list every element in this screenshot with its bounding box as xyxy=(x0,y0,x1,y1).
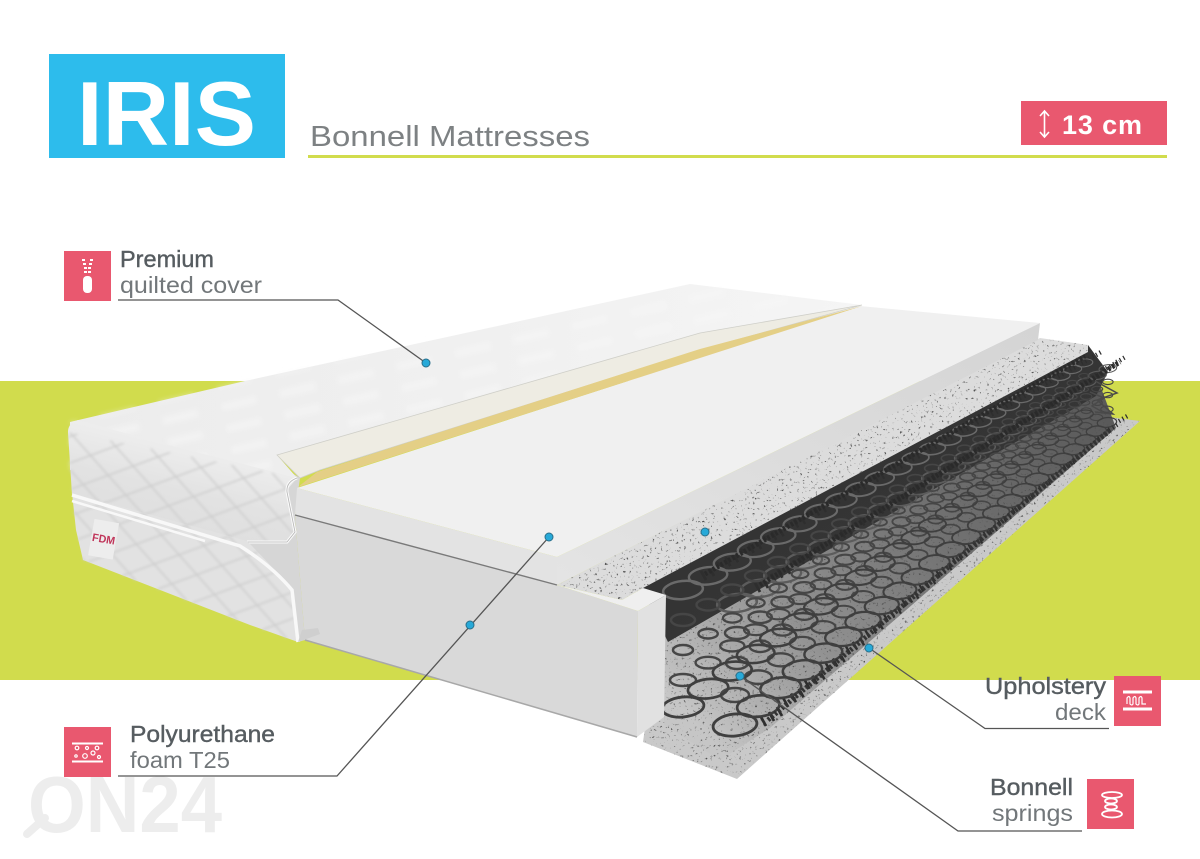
leader line xyxy=(118,537,549,776)
leader line xyxy=(118,300,426,363)
spring bed shading xyxy=(664,385,1116,760)
label text: deck xyxy=(1055,699,1107,725)
Bonnell spring rows xyxy=(661,351,1128,738)
callout: Bonnell springs xyxy=(736,672,1134,831)
label text: Upholstery xyxy=(985,673,1107,699)
marker dots xyxy=(701,528,873,652)
marker dots xyxy=(466,533,553,629)
label text: springs xyxy=(992,800,1073,826)
label text: quilted cover xyxy=(120,272,262,298)
cover lower flap with label xyxy=(72,493,320,642)
leader line xyxy=(869,648,1109,728)
height badge: 13 cm xyxy=(1021,101,1167,145)
title block: IRIS: IRIS xyxy=(77,64,256,165)
green background band xyxy=(0,381,1200,680)
lower upholstery deck xyxy=(643,352,1140,779)
callout: polyurethane foam T25 xyxy=(64,533,553,777)
icon: spring xyxy=(1087,779,1134,829)
label text xyxy=(120,246,262,298)
callout: upholstery deck xyxy=(701,528,1161,728)
gauze liner and yellow wadding xyxy=(277,305,862,487)
base foam block xyxy=(295,515,666,737)
leader line xyxy=(740,676,1082,831)
polyurethane foam slab xyxy=(295,306,1040,585)
sewn-in brand tag xyxy=(88,519,119,560)
mattress cutaway illustration xyxy=(68,284,1140,779)
label text xyxy=(990,774,1073,826)
sewn-in brand tag: FDM xyxy=(91,532,116,548)
cover front flap with quilting xyxy=(68,420,297,542)
cover top xyxy=(70,284,862,478)
marker dot xyxy=(736,672,744,680)
label text: Premium xyxy=(120,246,214,272)
upper upholstery deck xyxy=(557,338,1088,600)
callout: premium quilted cover xyxy=(64,246,430,367)
label text: Bonnell xyxy=(990,774,1073,800)
label text xyxy=(985,673,1107,725)
marker dot xyxy=(422,359,430,367)
label text: Polyurethane xyxy=(130,721,275,747)
subtitle: Bonnell Mattresses xyxy=(308,121,1167,158)
title block: IRIS xyxy=(49,54,285,165)
height badge: 13 cm: 13 cm xyxy=(1062,110,1142,140)
label text: foam T25 xyxy=(130,747,230,773)
icon: deck xyxy=(1114,676,1161,726)
label text xyxy=(130,721,275,773)
icon: foam xyxy=(64,727,111,777)
icon: zipper xyxy=(64,251,111,301)
cover and foam backing xyxy=(240,470,305,642)
watermark: ON24: ON24 xyxy=(28,760,222,849)
dark shadow behind upper springs xyxy=(640,345,1108,642)
subtitle: Bonnell Mattresses: Bonnell Mattresses xyxy=(310,121,590,153)
